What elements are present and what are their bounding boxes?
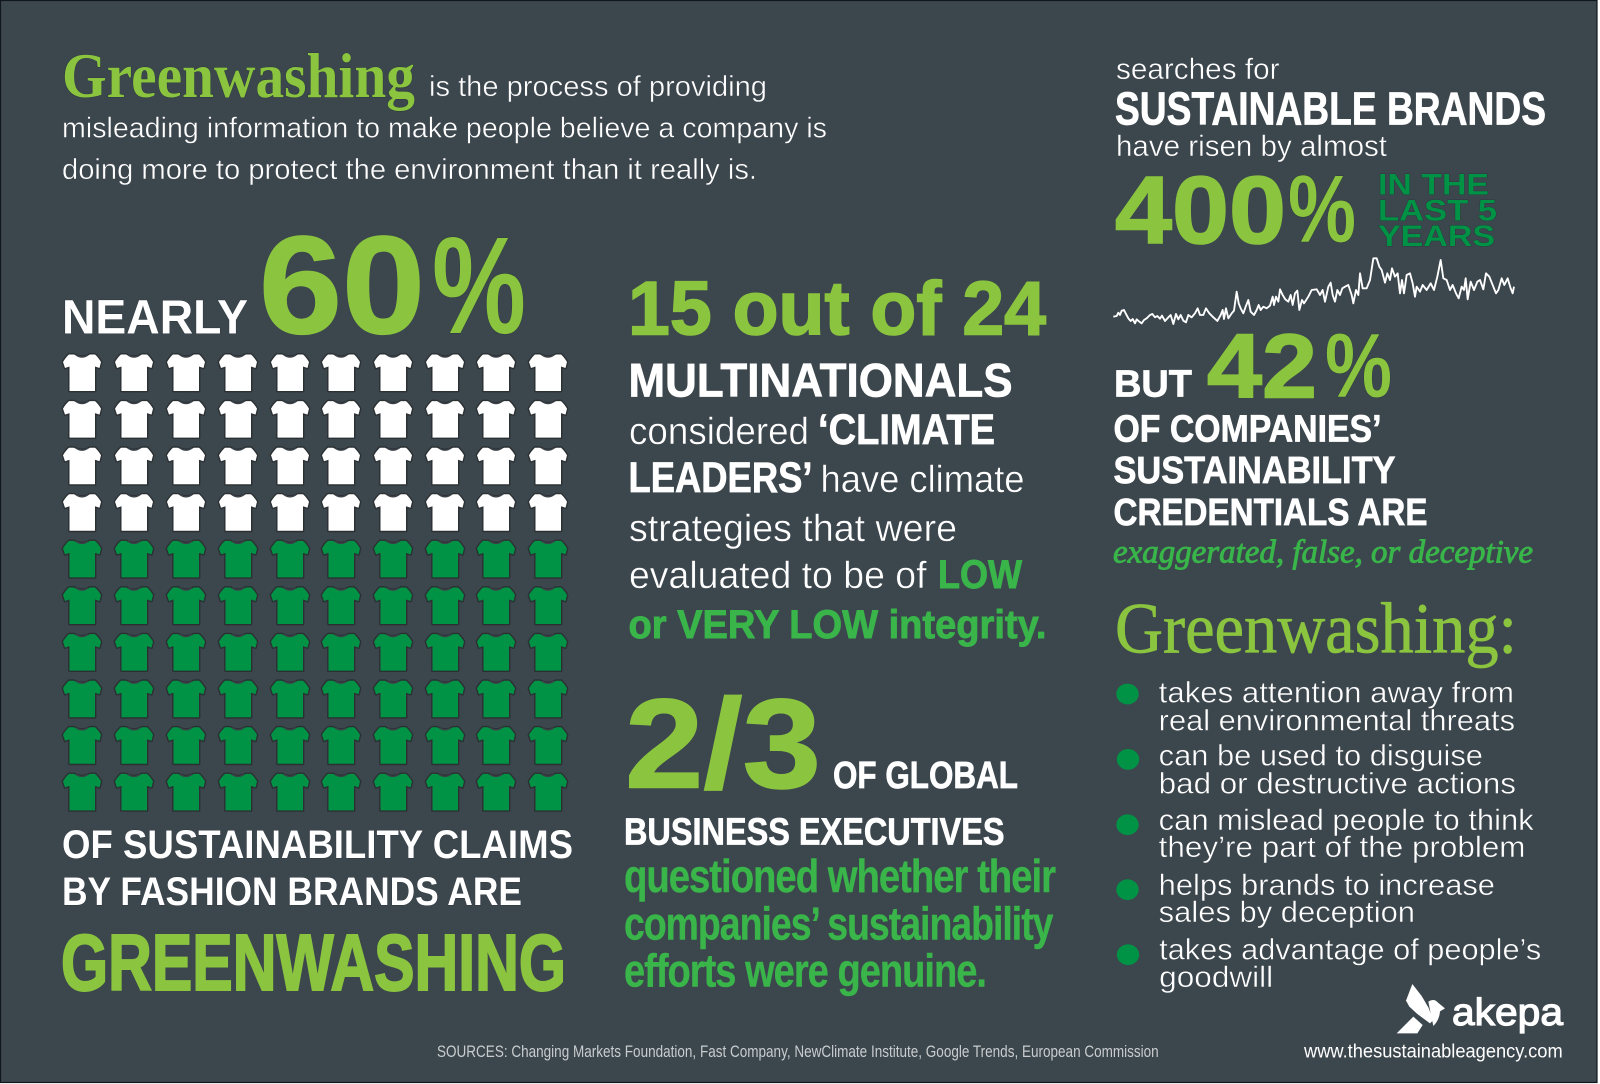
list item 2: can be used to disguise <box>1159 740 1483 773</box>
body text: climate leaders: MULTINATIONALS <box>628 354 1012 406</box>
body text: climate leaders: evaluated to be of <box>629 555 927 597</box>
footer: sources: SOURCES: Changing Markets Foundation, Fast Company, NewClimate Institute, Google Trends, European Commission <box>437 1042 1159 1061</box>
panel: searches for sustainable brands <box>1113 53 1546 324</box>
text: questioned whether efforts were genuine: companies’ sustainability <box>624 898 1054 950</box>
list item 3: can mislead people to think <box>1159 804 1535 837</box>
heading: nearly 60%: 60 <box>259 208 425 363</box>
body text: climate leaders: considered <box>629 411 809 453</box>
list item 3: they’re part of the problem <box>1159 831 1526 864</box>
text: questioned whether efforts were genuine: efforts were genuine. <box>624 944 986 996</box>
label: in the last 5 years <box>1378 168 1497 253</box>
list item 3 <box>1116 804 1535 864</box>
body text: climate leaders: have climate <box>820 459 1024 501</box>
body text: climate leaders: LEADERS’ <box>628 454 812 502</box>
stat: 400% <box>1115 156 1356 264</box>
body text: climate leaders: ‘CLIMATE <box>818 406 995 454</box>
heading: nearly 60%: % <box>432 209 526 363</box>
text: of global business executives: BUSINESS EXECUTIVES <box>624 812 1004 854</box>
body text: climate leaders: LOW <box>938 553 1022 597</box>
footer: website url: www.thesustainableagency.com <box>1303 1042 1563 1062</box>
stat: 400%: % <box>1288 156 1356 263</box>
list item 4 <box>1116 869 1495 929</box>
list item 1 <box>1116 677 1515 737</box>
stat: 2/3: 2/3 <box>625 672 821 814</box>
body text: climate leaders: strategies that were <box>629 508 957 550</box>
text: claims by fashion brands: BY FASHION BRANDS ARE <box>62 870 522 914</box>
stat: 400%: 400 <box>1115 157 1286 264</box>
list item 2 <box>1117 740 1516 800</box>
text: searches have risen: searches for <box>1116 53 1280 86</box>
heading: nearly 60% <box>62 208 526 363</box>
panel: 2/3 of global business executives <box>624 672 1056 996</box>
list item 1: real environmental threats <box>1159 704 1515 737</box>
text: companies' credentials: CREDENTIALS ARE <box>1114 492 1428 534</box>
text: of global business executives: OF GLOBAL <box>833 755 1018 797</box>
heading: Greenwashing:: Greenwashing: <box>1115 588 1517 668</box>
body text: climate leaders: or VERY LOW integrity. <box>628 603 1046 647</box>
panel: 15 out of 24 multinationals <box>628 266 1046 647</box>
panel: nearly 60% fashion claims <box>61 208 573 1007</box>
stat: but 42%: BUT <box>1114 364 1192 406</box>
text: searches have risen: have risen by almost <box>1116 130 1388 163</box>
title word: Greenwashing: Greenwashing <box>62 41 415 111</box>
stat: 15 out of 24: 15 out of 24 <box>628 266 1046 352</box>
logo: akepa <box>1397 984 1564 1034</box>
panel: but 42% of companies <box>1113 316 1533 570</box>
pictogram: 100 shirts, 40 white and 60 green <box>63 354 567 810</box>
panel: greenwashing effects list <box>1115 588 1541 994</box>
list item 5: takes advantage of people’s <box>1159 934 1541 967</box>
text: searches have risen <box>1115 53 1546 163</box>
highlight: GREENWASHING: GREENWASHING <box>61 918 566 1007</box>
text: claims by fashion brands: OF SUSTAINABILITY CLAIMS <box>62 823 573 867</box>
stat: but 42%: % <box>1325 316 1392 417</box>
list item 2: bad or destructive actions <box>1159 767 1516 800</box>
line chart: search trend <box>1113 258 1514 324</box>
text: companies' credentials <box>1114 408 1428 534</box>
text: exaggerated, false, or deceptive: exaggerated, false, or deceptive <box>1113 534 1533 570</box>
text: companies' credentials: OF COMPANIES’ <box>1114 408 1382 450</box>
intro definition text: is the process of providing <box>429 71 767 103</box>
list item 4: helps brands to increase <box>1159 869 1495 902</box>
body text: climate leaders <box>628 354 1046 647</box>
logo: akepa: akepa <box>1452 992 1564 1034</box>
text: companies' credentials: SUSTAINABILITY <box>1114 450 1396 492</box>
text: questioned whether efforts were genuine: questioned whether their <box>624 850 1056 902</box>
list item 5 <box>1117 934 1541 994</box>
list item 1: takes attention away from <box>1159 677 1514 710</box>
heading: nearly 60%: NEARLY <box>62 292 248 344</box>
text: of global business executives <box>624 755 1018 854</box>
label: in the last 5 years: YEARS <box>1378 220 1495 253</box>
list item 5: goodwill <box>1159 961 1273 994</box>
stat: but 42% <box>1114 316 1392 418</box>
intro definition text <box>62 41 827 186</box>
intro definition text: doing more to protect the environment than it really is. <box>62 154 757 186</box>
stat: but 42%: 42 <box>1207 316 1317 418</box>
label: in the last 5 years: LAST 5 <box>1378 194 1497 228</box>
icon: akepa bird <box>1397 984 1445 1033</box>
intro definition text: misleading information to make people believe a company is <box>62 112 827 144</box>
text: questioned whether efforts were genuine <box>624 850 1056 996</box>
list item 4: sales by deception <box>1159 896 1415 929</box>
text: claims by fashion brands <box>62 823 573 914</box>
label: in the last 5 years: IN THE <box>1378 168 1489 202</box>
